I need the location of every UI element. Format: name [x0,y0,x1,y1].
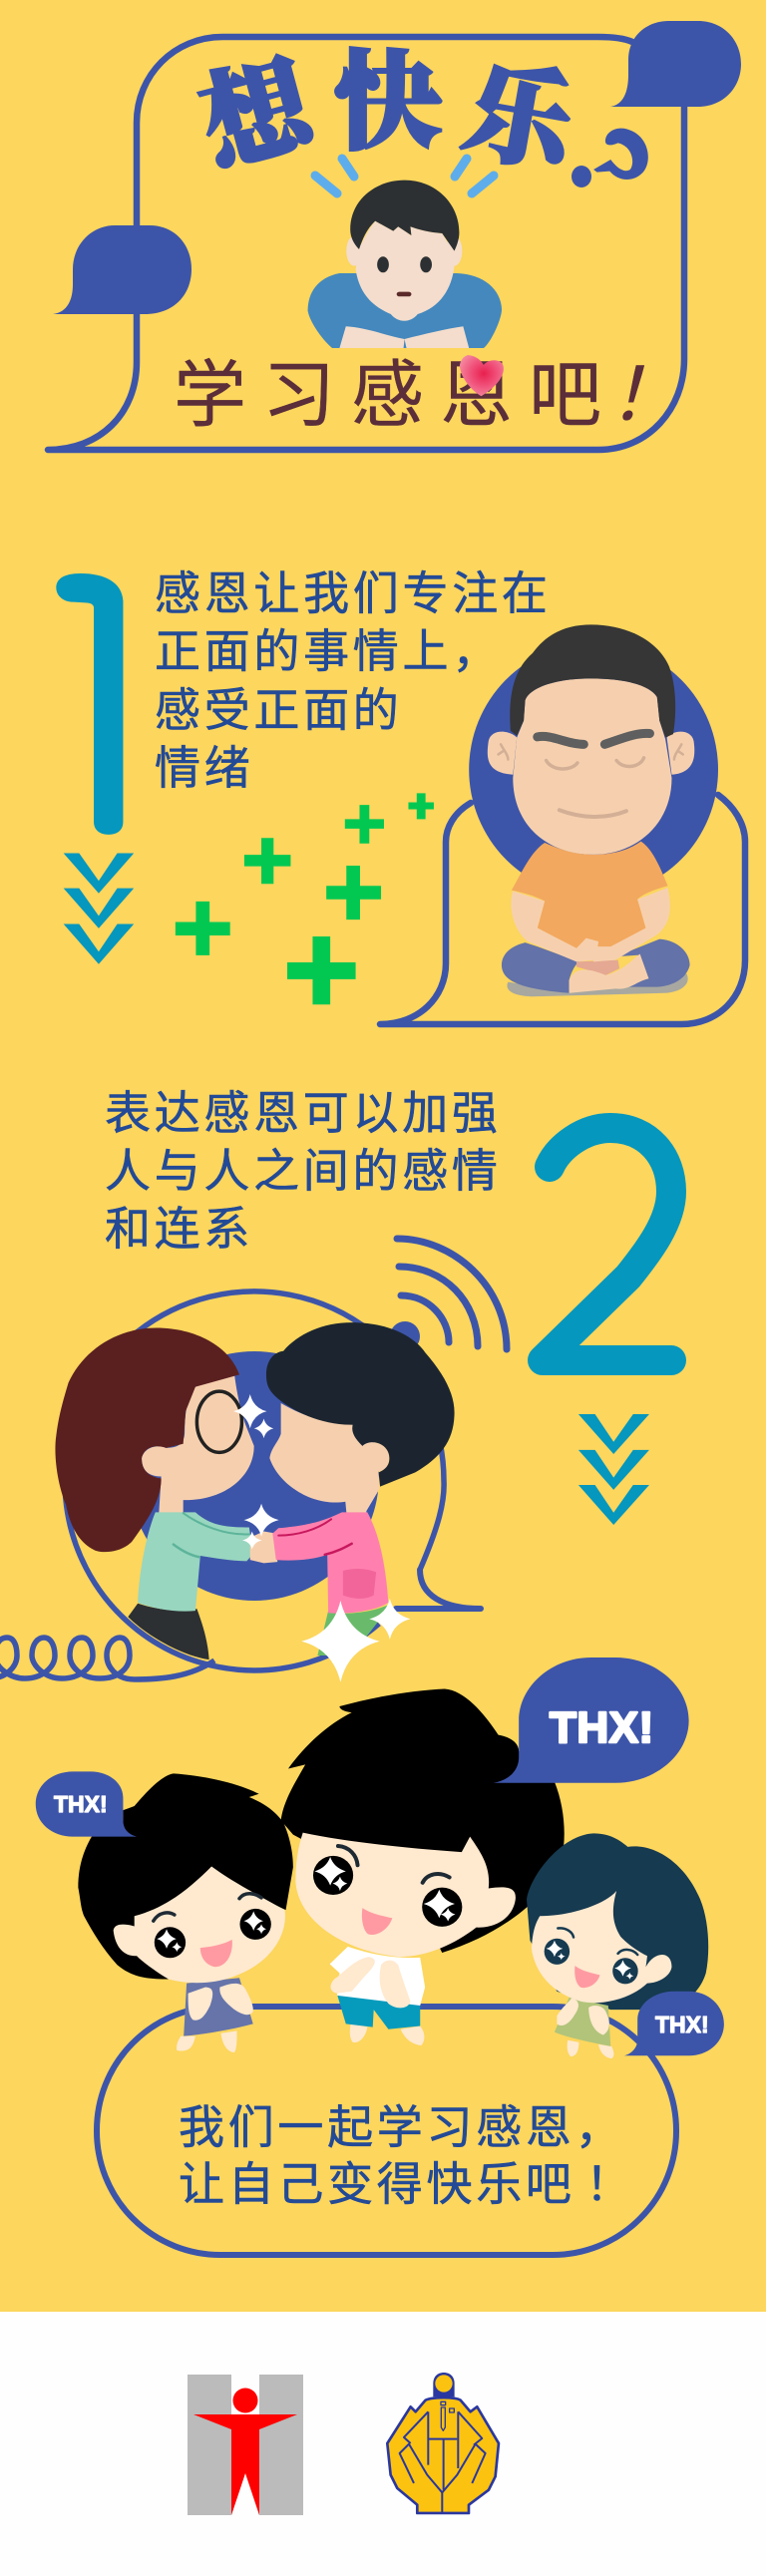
panel: point 1 [56,567,745,1024]
heading: 想快乐: 想 [183,16,335,195]
kid: centre boy [281,1688,565,2045]
text: closing message: 让自己变得快乐吧 [179,2158,575,2210]
subtitle: 学习感恩吧！: ！ [604,354,697,436]
speech circle outline [65,1291,444,1670]
illustration: three thankful kids [78,1688,708,2058]
panel: title header [48,16,741,450]
header frame outline [48,37,684,450]
heading: 想快乐 [183,16,596,195]
text: point 2 [105,1087,502,1255]
text: point 1 [155,567,552,794]
speech bubble left [53,225,192,314]
text: point 1: 感恩让我们专注在 [155,567,552,619]
text: closing message [179,2101,635,2210]
text: closing message: ！ [585,2158,635,2210]
panel: point 2 [0,1087,671,1682]
subtitle: 学习感恩吧！: 学习感恩吧 [174,355,601,436]
signal dot [390,1321,420,1351]
icon: signal waves [397,1239,507,1349]
speech bubble: right THX [624,1992,724,2055]
icon: surprise ticks [315,159,494,193]
speech bubble: left THX: THX! [54,1791,108,1817]
logo: red figure on grey [188,2375,303,2515]
big number 1 [56,573,123,835]
panel: closing message [36,1657,724,2255]
rounded text frame [97,2007,676,2255]
illustration: two friends fist bump [55,1322,455,1682]
text: point 1: 情绪 [155,742,253,794]
speech tail [396,1570,481,1609]
speech bubble top right [610,21,741,107]
text: point 2: 表达感恩可以加强 [105,1087,502,1139]
icon: triple down chevrons [64,853,134,964]
icon: triple down chevrons [578,1414,649,1525]
text: point 1: 正面的事情上， [155,625,502,677]
kid: left child [78,1773,293,2052]
text: point 2: 人与人之间的感情 [105,1145,502,1197]
kid: right child [527,1833,708,2058]
icon: boy bowing [308,181,502,348]
icon: green plus signs [176,793,434,1004]
heading: 想快乐: 快 [334,16,442,171]
speech bubble: large THX: THX! [550,1703,654,1752]
icon: dot and question mark [572,129,648,187]
text: point 1: 感受正面的 [155,684,403,736]
icon: meditating man [469,624,718,996]
logo: hands holding worker [387,2373,499,2513]
big number 2 [543,1128,671,1360]
heading: 想快乐: 乐 [453,23,596,195]
text: point 2: 和连系 [105,1203,253,1255]
speech bubble: left THX [36,1771,137,1837]
coil cord [0,1638,214,1679]
speech frame outline [380,795,745,1024]
icon: watercolor heart [460,355,504,396]
text: closing message: 我们一起学习感恩， [179,2101,624,2153]
blue disc [130,1351,379,1601]
footer background [0,2312,766,2576]
speech bubble: large THX [494,1657,689,1783]
speech bubble: right THX: THX! [655,2012,709,2037]
